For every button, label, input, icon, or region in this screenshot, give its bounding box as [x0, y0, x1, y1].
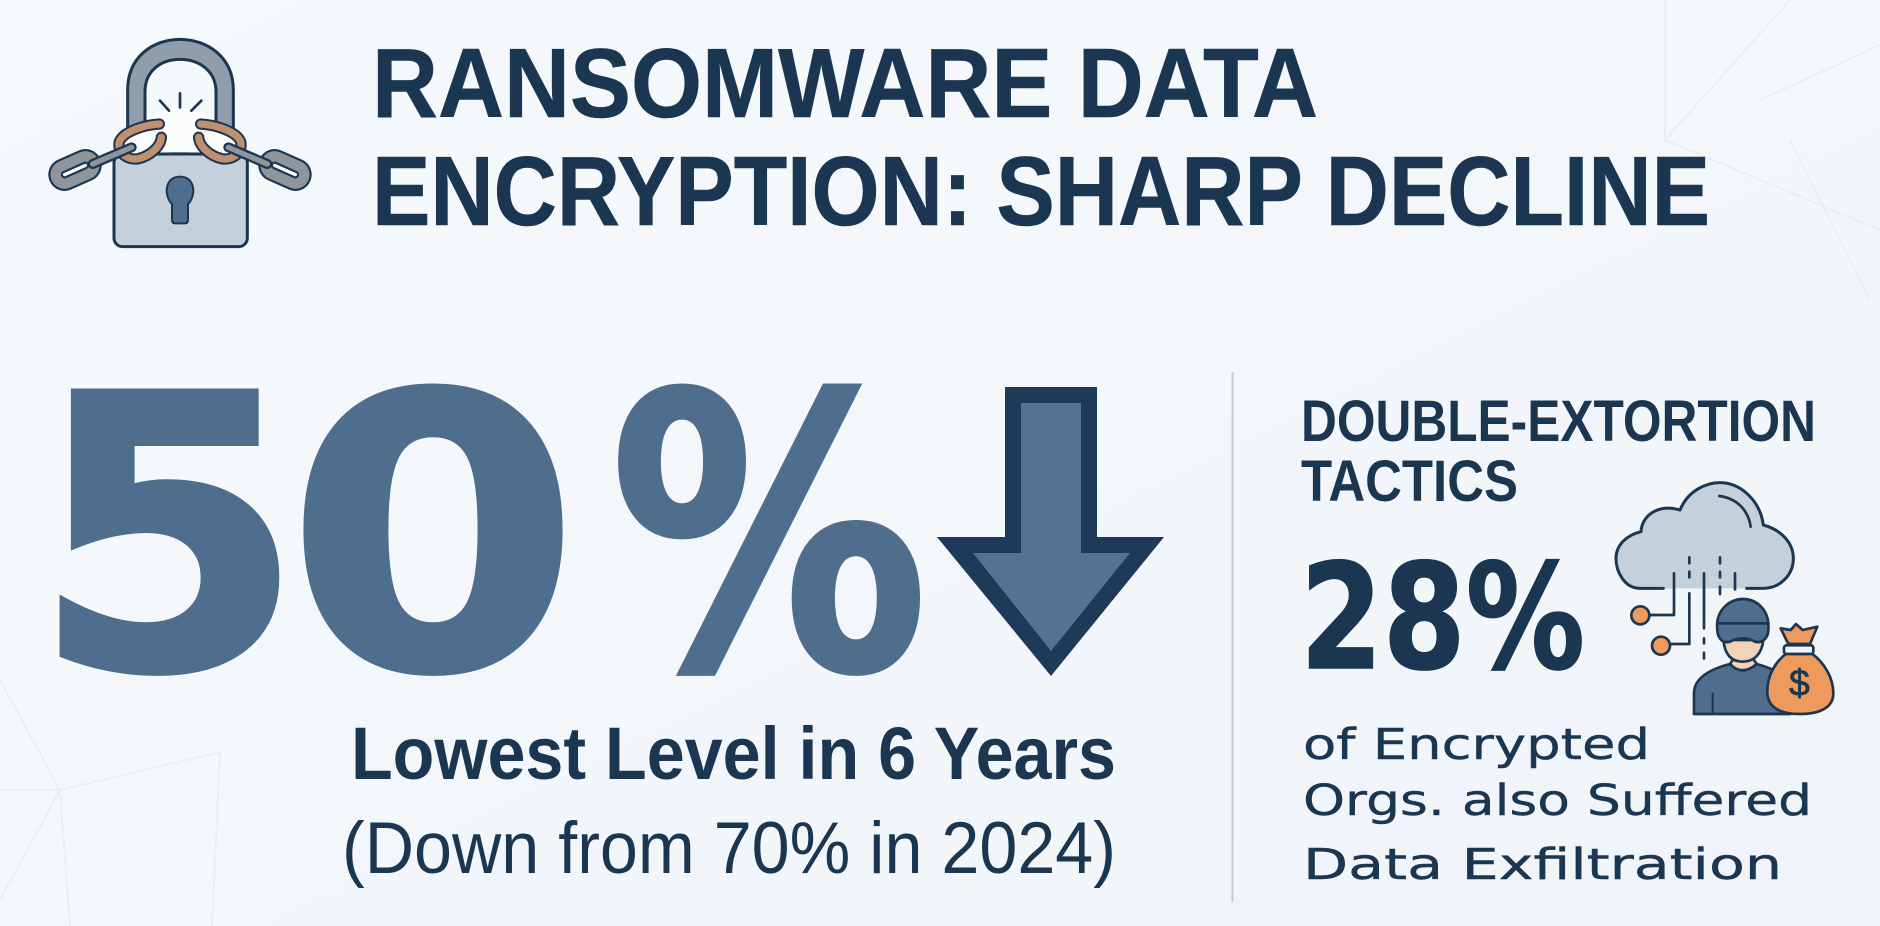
description text — [1303, 720, 1812, 890]
statistic caption — [342, 712, 1116, 889]
description text: Data Exfiltration — [1303, 840, 1782, 890]
money bag — [1767, 624, 1833, 714]
money bag: $ — [1789, 661, 1810, 703]
keyhole — [167, 177, 193, 223]
statistic: 28%: 28% — [1300, 533, 1585, 703]
hacker figure — [1694, 599, 1790, 714]
heading: double-extortion tactics: TACTICS — [1301, 449, 1518, 514]
right chain — [199, 124, 307, 186]
divider — [1232, 372, 1234, 902]
big statistic: 50%: 0 — [286, 315, 580, 758]
title: ENCRYPTION: SHARP DECLINE — [372, 136, 1710, 246]
icon: broken padlock — [53, 39, 307, 247]
big statistic: 50%: % — [610, 315, 928, 758]
big statistic: 50%: 5 — [32, 315, 304, 758]
big statistic: 50% — [32, 315, 928, 758]
left chain — [53, 124, 161, 186]
arrow: downward decline — [937, 387, 1164, 676]
title — [372, 28, 1710, 246]
padlock shackle — [128, 39, 233, 128]
description text: of Encrypted — [1303, 720, 1650, 770]
padlock body — [114, 154, 247, 247]
icon: cloud data theft with hacker and money bag — [1616, 483, 1833, 714]
statistic caption: Lowest Level in 6 Years — [351, 712, 1116, 795]
data circuit lines — [1631, 557, 1735, 658]
description text: Orgs. also Suffered — [1303, 776, 1812, 826]
title: RANSOMWARE DATA — [372, 28, 1318, 138]
statistic caption: (Down from 70% in 2024) — [342, 808, 1116, 889]
cloud — [1616, 483, 1793, 588]
heading: double-extortion tactics — [1301, 389, 1816, 514]
